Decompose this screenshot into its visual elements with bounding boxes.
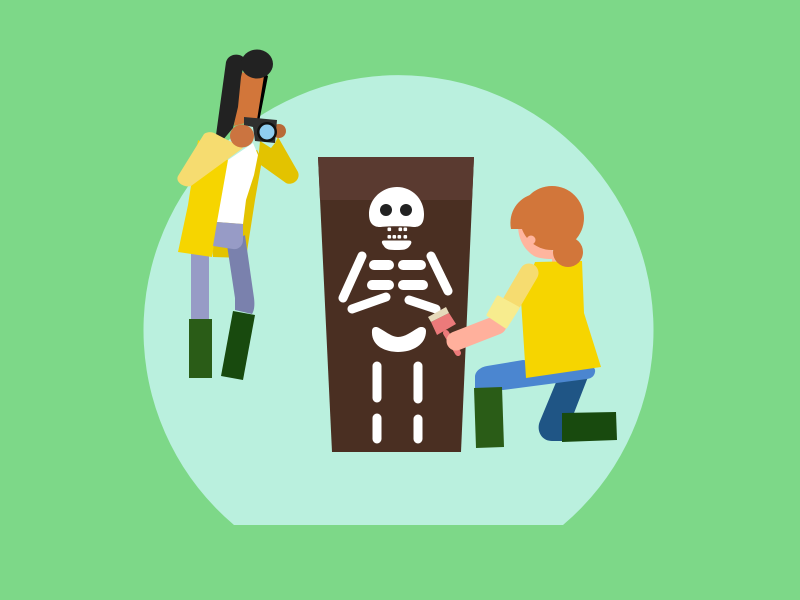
- ribs and arm bones: [343, 256, 448, 439]
- brush bristles: [428, 307, 449, 322]
- lower leg: [539, 377, 588, 441]
- skull: [369, 187, 424, 250]
- back hair: [255, 72, 268, 122]
- brush head: [431, 313, 456, 335]
- right hand: [272, 124, 286, 138]
- vest: [521, 261, 601, 378]
- forearm: [456, 325, 497, 341]
- photographer: [177, 50, 299, 380]
- white shirt: [217, 143, 258, 224]
- skeleton: [343, 187, 448, 439]
- camera: [244, 117, 277, 143]
- rear boot: [474, 387, 504, 448]
- hips: [213, 222, 243, 249]
- face and neck: [518, 225, 556, 263]
- brush handle: [446, 333, 458, 353]
- pit soil: [318, 157, 474, 452]
- pelvis: [372, 327, 426, 352]
- ear: [526, 236, 536, 244]
- front boot: [562, 412, 617, 442]
- right arm: [258, 137, 299, 184]
- hair: [510, 186, 584, 252]
- back boot: [221, 311, 255, 380]
- coat front: [178, 140, 228, 257]
- face: [234, 72, 264, 126]
- thigh: [475, 360, 595, 390]
- long hair: [216, 55, 245, 147]
- front boot: [189, 319, 212, 378]
- back leg: [227, 235, 254, 314]
- hair bun: [241, 50, 273, 78]
- cuff: [488, 297, 518, 327]
- coat back panel: [212, 150, 262, 258]
- hair bun: [553, 237, 583, 267]
- left hand: [230, 124, 254, 148]
- topsoil band: [318, 157, 474, 200]
- front leg: [191, 250, 209, 320]
- left sleeve: [177, 132, 243, 186]
- upper sleeve: [512, 273, 529, 302]
- archaeologist kneeling: [428, 186, 617, 448]
- pale mint circle backdrop: [144, 75, 654, 525]
- excavation pit with skeleton: [318, 157, 474, 452]
